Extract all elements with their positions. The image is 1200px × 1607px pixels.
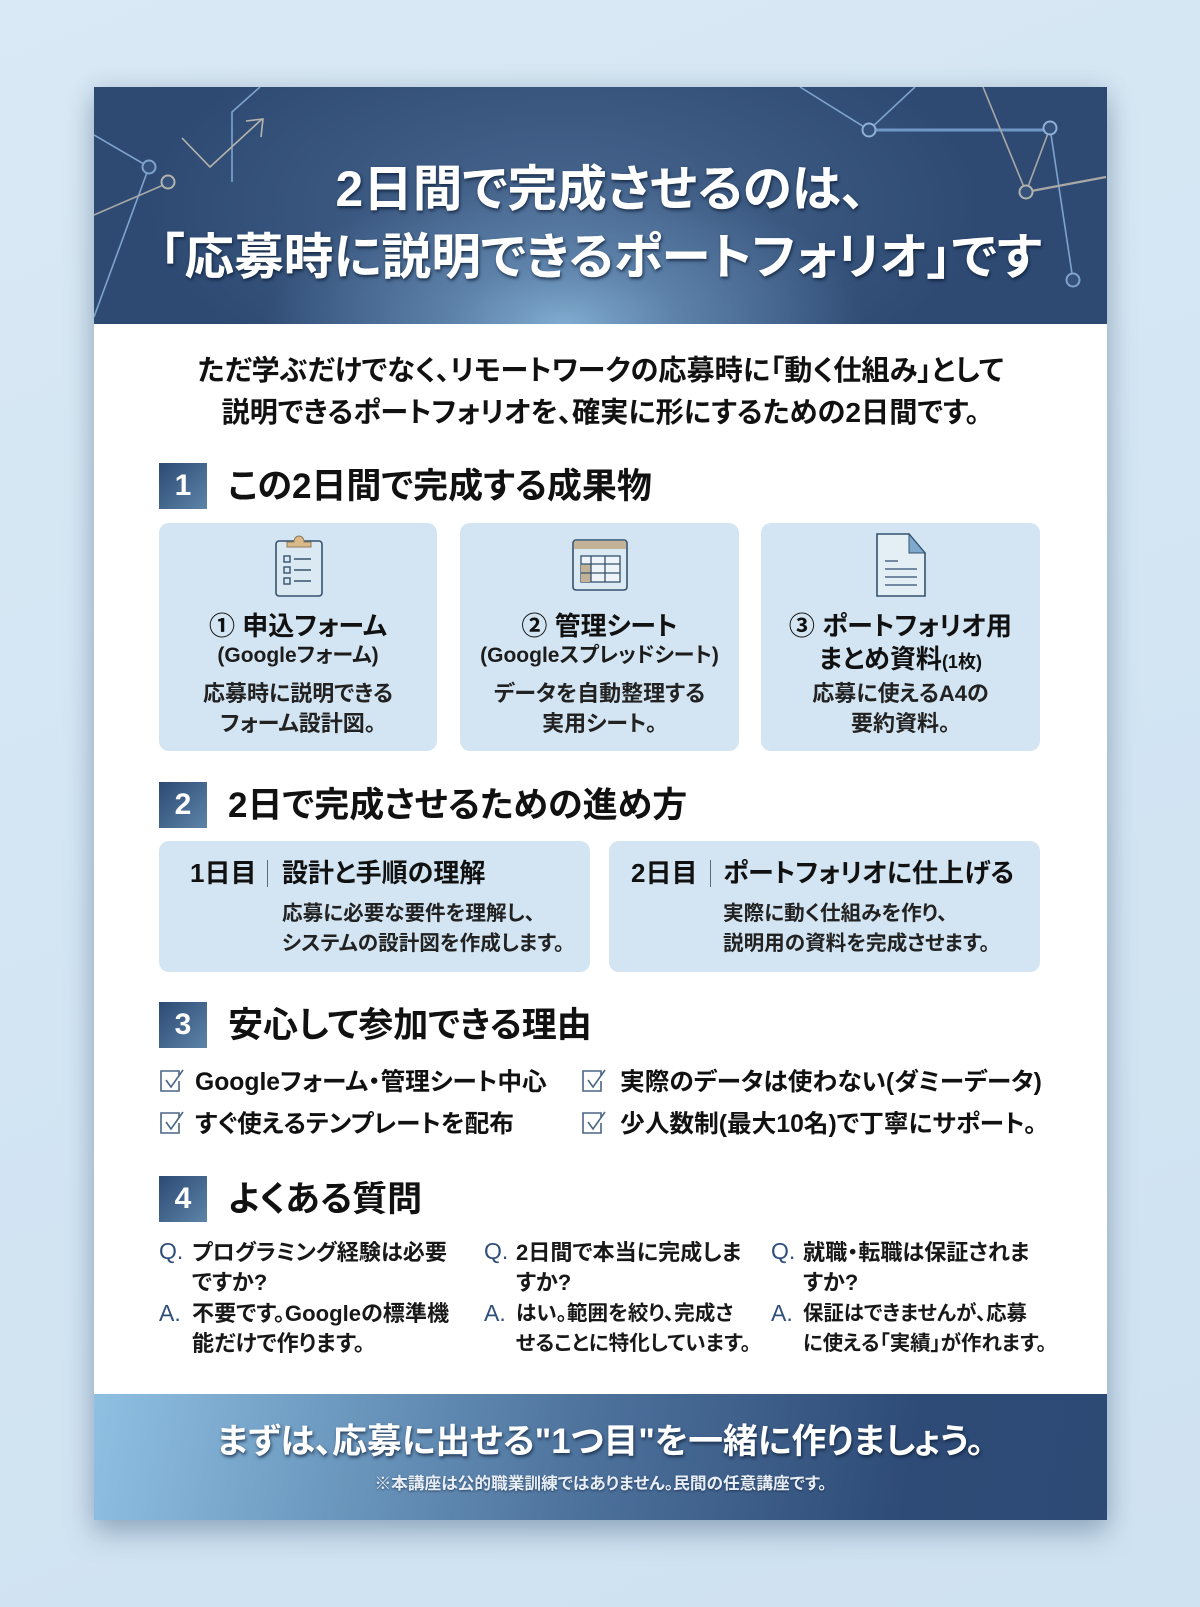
day description: システムの設計図を作成します。 xyxy=(282,932,564,955)
day title: 設計と手順の理解 xyxy=(282,858,485,888)
card title: ① 申込フォーム xyxy=(209,611,387,641)
question: すか? xyxy=(803,1270,858,1295)
icon: document xyxy=(876,533,926,597)
number badge: 1 xyxy=(175,469,191,502)
footer banner xyxy=(94,1394,1107,1520)
section 2 heading xyxy=(159,782,687,828)
intro text xyxy=(198,354,1003,428)
number badge: 3 xyxy=(175,1008,191,1041)
card subtitle: (Googleフォーム) xyxy=(217,644,379,667)
check icon xyxy=(582,1070,606,1092)
card title xyxy=(789,611,1012,674)
question: ですか? xyxy=(192,1270,267,1295)
check icon xyxy=(160,1070,184,1092)
icon: clipboard checklist xyxy=(275,536,323,597)
icon: spreadsheet xyxy=(572,539,628,591)
faq item 2 xyxy=(484,1238,751,1355)
question: 就職・転職は保証されま xyxy=(803,1240,1030,1265)
answer: 保証はできませんが、応募 xyxy=(803,1303,1027,1325)
heading text: 安心して参加できる理由 xyxy=(228,1006,592,1045)
card title: ② 管理シート xyxy=(521,611,678,641)
call to action: まずは、応募に出せる"1つ目"を一緒に作りましょう。 xyxy=(217,1422,984,1461)
number badge xyxy=(159,1002,207,1048)
day label: 2日目 xyxy=(631,858,697,888)
card description: 応募に使えるA4の xyxy=(812,681,989,706)
faq item 3 xyxy=(771,1238,1047,1355)
check icon xyxy=(582,1112,606,1134)
checklist: reasons xyxy=(160,1068,1042,1138)
card subtitle: (Googleスプレッドシート) xyxy=(480,644,719,667)
day description: 説明用の資料を完成させます。 xyxy=(723,932,990,955)
network line decoration xyxy=(94,87,1106,318)
day description: 実際に動く仕組みを作り、 xyxy=(723,902,947,925)
reason text: Googleフォーム・管理シート中心 xyxy=(195,1069,547,1096)
day description xyxy=(282,902,564,955)
intro text: ただ学ぶだけでなく、リモートワークの応募時に「動く仕組み」として xyxy=(198,354,1003,386)
question xyxy=(803,1240,1030,1295)
title: 2日間で完成させるのは、 xyxy=(335,161,866,217)
question: すか? xyxy=(516,1270,571,1295)
card title: まとめ資料(1枚) xyxy=(819,644,982,674)
card: portfolio summary xyxy=(761,523,1040,751)
reason text: 実際のデータは使わない(ダミーデータ) xyxy=(620,1069,1042,1096)
card title: ③ ポートフォリオ用 xyxy=(789,611,1012,641)
card description xyxy=(203,681,393,736)
question xyxy=(192,1240,447,1295)
card description: 応募時に説明できる xyxy=(203,681,393,706)
answer: 能だけで作ります。 xyxy=(192,1331,365,1356)
question: プログラミング経験は必要 xyxy=(192,1240,447,1265)
A mark: A. xyxy=(771,1300,793,1326)
question xyxy=(516,1240,742,1295)
answer xyxy=(516,1302,751,1355)
poster sheet xyxy=(94,87,1107,1520)
answer: に使える「実績」が作れます。 xyxy=(803,1333,1047,1355)
heading text: 2日で完成させるための進め方 xyxy=(228,786,687,825)
intro text: 説明できるポートフォリオを、確実に形にするための2日間です。 xyxy=(221,396,980,428)
divider xyxy=(267,860,268,887)
number badge xyxy=(159,1176,207,1222)
heading text: この2日間で完成する成果物 xyxy=(228,467,652,506)
heading text: よくある質問 xyxy=(228,1180,422,1219)
disclaimer: ※本講座は公的職業訓練ではありません。民間の任意講座です。 xyxy=(374,1474,827,1493)
card: application form xyxy=(159,523,437,751)
header banner xyxy=(94,87,1107,324)
section 1 heading xyxy=(159,463,652,509)
check icon xyxy=(160,1112,184,1134)
number badge: 2 xyxy=(175,788,191,821)
card description xyxy=(494,681,705,736)
answer: せることに特化しています。 xyxy=(516,1332,751,1355)
Q mark: Q. xyxy=(771,1238,795,1264)
title: 「応募時に説明できるポートフォリオ」です xyxy=(160,229,1041,285)
card description: データを自動整理する xyxy=(494,681,705,706)
day title: ポートフォリオに仕上げる xyxy=(723,858,1014,888)
answer: はい。範囲を絞り、完成さ xyxy=(516,1302,733,1325)
day description: 応募に必要な要件を理解し、 xyxy=(282,902,535,925)
title xyxy=(160,161,1044,285)
card: day 1 xyxy=(159,841,590,972)
card description: 実用シート。 xyxy=(542,710,657,736)
day description xyxy=(723,902,990,955)
faq item 1 xyxy=(159,1238,449,1356)
number badge: 4 xyxy=(175,1182,191,1215)
section 4 heading xyxy=(159,1176,422,1222)
A mark: A. xyxy=(484,1300,506,1326)
answer xyxy=(803,1302,1047,1355)
number badge xyxy=(159,782,207,828)
section 3 heading xyxy=(159,1002,592,1048)
card description: 要約資料。 xyxy=(851,710,950,736)
Q mark: Q. xyxy=(484,1238,508,1264)
card description xyxy=(812,681,989,736)
divider xyxy=(710,860,711,887)
Q mark: Q. xyxy=(159,1238,183,1264)
A mark: A. xyxy=(159,1300,181,1326)
card description: フォーム設計図。 xyxy=(220,710,376,736)
reason text: すぐ使えるテンプレートを配布 xyxy=(195,1111,514,1138)
card: day 2 xyxy=(609,841,1040,972)
card: management sheet xyxy=(460,523,739,751)
answer: 不要です。Googleの標準機 xyxy=(192,1301,449,1326)
day label: 1日目 xyxy=(190,858,256,888)
answer xyxy=(192,1301,449,1356)
number badge xyxy=(159,463,207,509)
question: 2日間で本当に完成しま xyxy=(516,1240,742,1265)
reason text: 少人数制(最大10名)で丁寧にサポート。 xyxy=(620,1111,1036,1138)
